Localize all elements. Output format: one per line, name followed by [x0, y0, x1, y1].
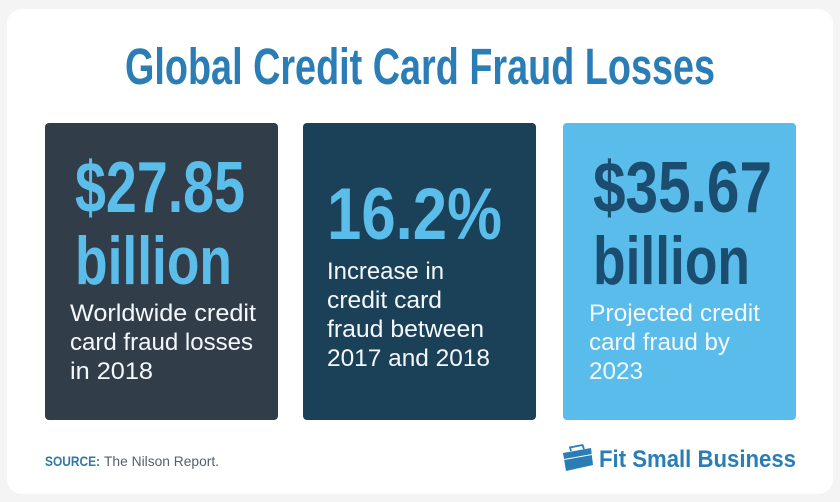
stat: $27.85 billion — [75, 148, 245, 299]
stat: $27.85 billion: billion — [75, 223, 232, 299]
description: projected fraud: Projected credit — [589, 300, 760, 327]
stat: $35.67 billion: billion — [593, 223, 750, 299]
source note — [45, 453, 219, 469]
description: worldwide losses: in 2018 — [70, 358, 153, 385]
description: fraud increase: Increase in — [327, 258, 444, 285]
description: fraud increase: 2017 and 2018 — [327, 345, 490, 372]
stat: $35.67 billion: $35.67 — [593, 148, 772, 228]
source note: SOURCE: — [45, 453, 100, 469]
description: fraud increase — [327, 258, 490, 372]
panel: projected fraud — [563, 123, 796, 420]
description: worldwide losses — [70, 300, 256, 385]
description: worldwide losses: card fraud losses — [70, 329, 253, 356]
panel: fraud increase — [303, 123, 536, 420]
logo wordmark: Fit Small Business — [599, 446, 796, 473]
panel: worldwide losses — [45, 123, 278, 420]
stat: 16.2%: 16.2% — [327, 174, 502, 255]
stat: $27.85 billion: $27.85 — [75, 148, 245, 228]
description: worldwide losses: Worldwide credit — [70, 300, 256, 327]
source note: The Nilson Report. — [104, 453, 219, 469]
icon: briefcase — [563, 445, 593, 471]
description: projected fraud: card fraud by — [589, 329, 730, 356]
description: projected fraud — [589, 300, 760, 385]
description: fraud increase: fraud between — [327, 316, 484, 343]
description: projected fraud: 2023 — [589, 358, 643, 385]
description: fraud increase: credit card — [327, 287, 442, 314]
stat: $35.67 billion — [593, 148, 772, 299]
